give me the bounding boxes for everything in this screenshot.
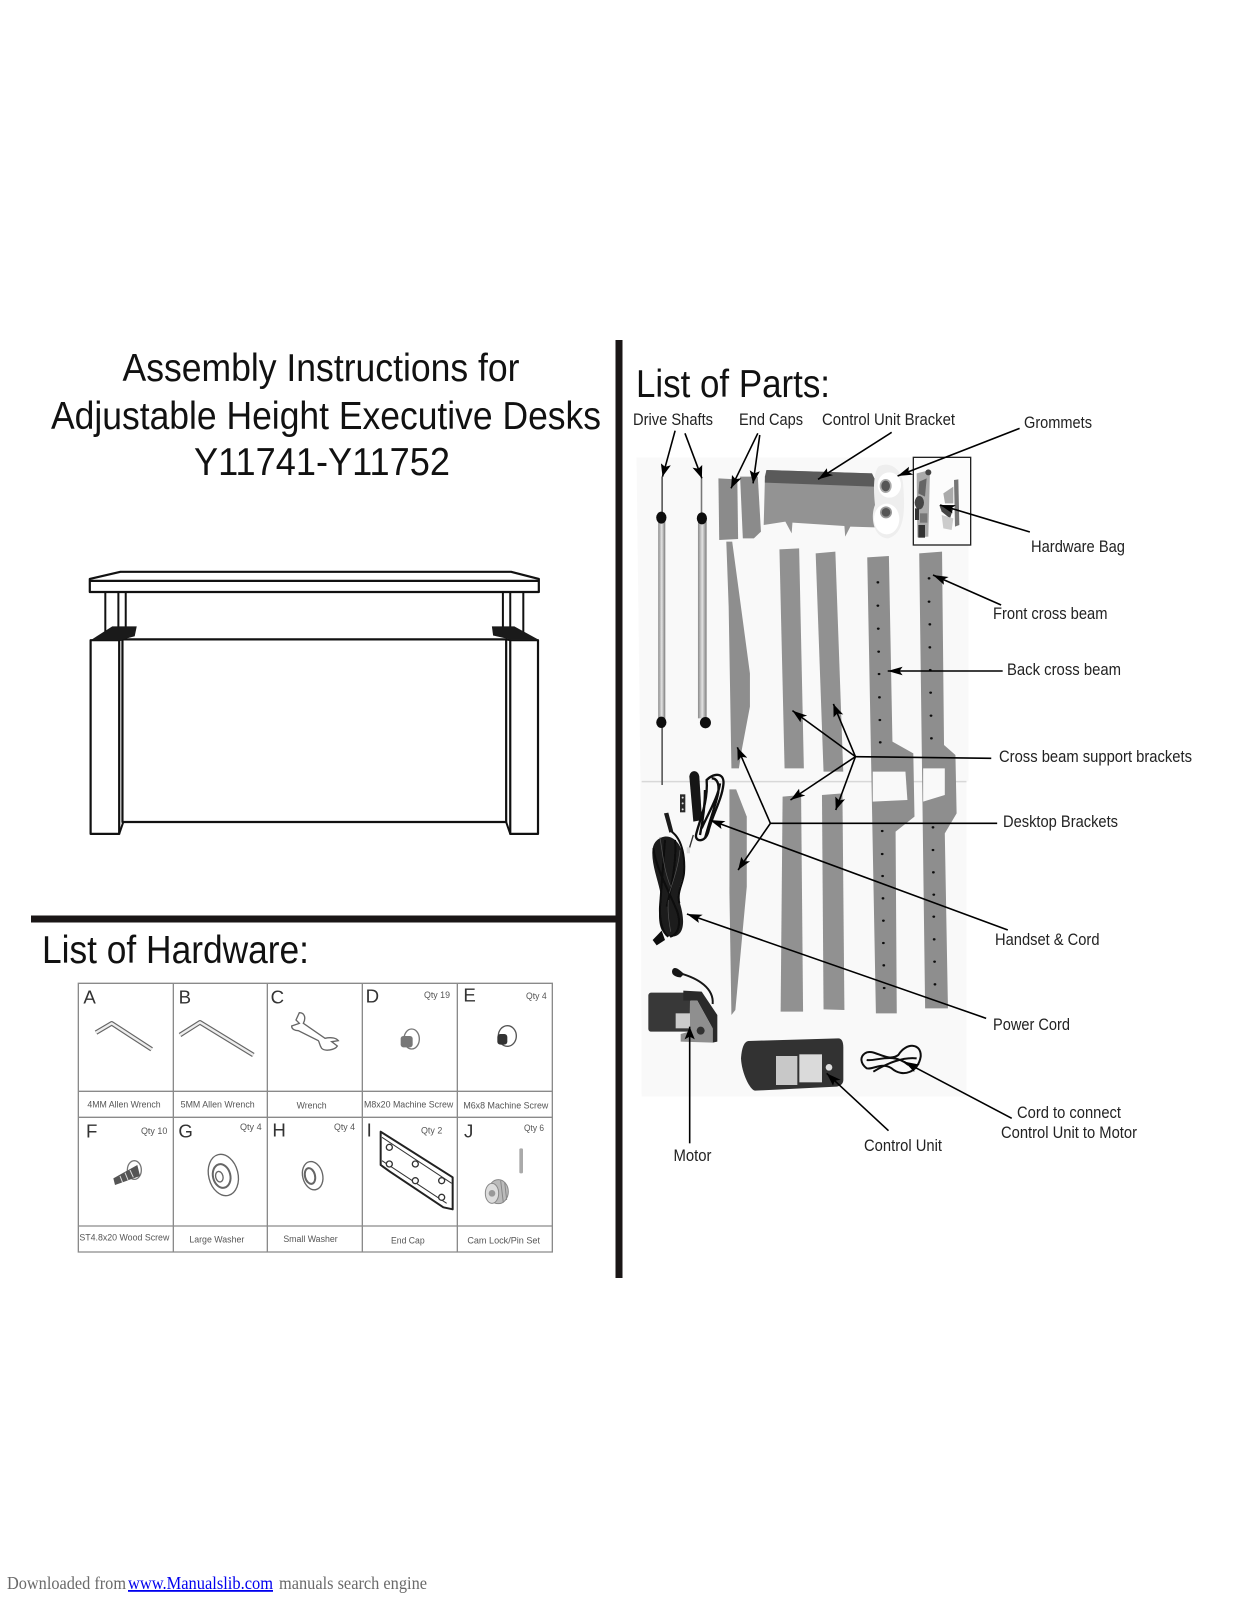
label: back cross beam: Back cross beam — [1007, 661, 1121, 679]
item F: wood screw: F — [86, 1121, 97, 1142]
handset and power cord — [652, 771, 724, 945]
item I: end cap plate: Qty 2 — [421, 1125, 442, 1135]
label: grommets: Grommets — [1024, 414, 1092, 432]
label: handset and cord: Handset & Cord — [995, 931, 1100, 949]
item H: small washer: Qty 4 — [334, 1122, 355, 1132]
item E: M6x8 machine screw — [463, 985, 549, 1110]
drive shafts — [656, 477, 711, 785]
control unit — [741, 1038, 843, 1091]
grommets and hardware bag — [873, 457, 971, 545]
item J: cam lock and pin set — [464, 1121, 544, 1245]
cross beam support brackets — [779, 548, 844, 1012]
label: desktop brackets: Desktop Brackets — [1003, 813, 1118, 831]
heading: list of hardware: List of Hardware: — [42, 929, 309, 972]
horizontal divider — [31, 916, 616, 922]
footer source line — [7, 1573, 427, 1593]
item J: cam lock and pin set: Cam Lock/Pin Set — [467, 1235, 541, 1245]
label: control unit: Control Unit — [864, 1137, 942, 1155]
footer source line: manuals search engine — [279, 1573, 427, 1593]
label: power cord: Power Cord — [993, 1016, 1070, 1034]
item A: 4MM Allen wrench: 4MM Allen Wrench — [87, 1100, 161, 1110]
arrows: desktop brackets — [737, 747, 997, 870]
handset and cord — [680, 771, 724, 853]
item E: M6x8 machine screw: E — [463, 985, 476, 1006]
arrows: end caps — [731, 433, 760, 488]
desktop brackets — [726, 542, 750, 1015]
title: Y11741-Y11752 — [194, 441, 450, 484]
label: cord to connect control unit to motor: Cord to connect — [1017, 1104, 1121, 1122]
end caps — [718, 477, 761, 540]
back cross beam — [867, 556, 914, 1013]
item C: wrench: Wrench — [297, 1100, 327, 1110]
item D: M8x20 machine screw: D — [366, 986, 379, 1007]
heading: list of parts: List of Parts: — [636, 363, 830, 406]
item C: wrench — [271, 986, 338, 1110]
title — [51, 347, 601, 484]
grommets — [873, 465, 904, 538]
table grid — [78, 983, 552, 1252]
item F: wood screw: ST4.8x20 Wood Screw — [79, 1232, 170, 1242]
item C: wrench: C — [271, 986, 284, 1007]
arrows — [663, 428, 1030, 1143]
arrow: grommets — [898, 428, 1020, 476]
item E: M6x8 machine screw: M6x8 Machine Screw — [463, 1100, 549, 1110]
arrow: control unit bracket — [818, 432, 892, 479]
item B: 5MM Allen wrench: 5MM Allen Wrench — [181, 1100, 255, 1110]
item H: small washer: H — [272, 1120, 286, 1141]
arrow: control unit — [827, 1073, 889, 1131]
item B: 5MM Allen wrench: B — [179, 986, 191, 1007]
item F: wood screw: Qty 10 — [141, 1126, 167, 1136]
arrow: motor — [689, 1027, 691, 1143]
label: hardware bag: Hardware Bag — [1031, 538, 1125, 556]
desk line drawing — [90, 572, 539, 834]
item G: large washer — [178, 1121, 262, 1245]
item D: M8x20 machine screw: Qty 19 — [424, 990, 450, 1000]
power cord — [652, 813, 684, 945]
item I: end cap plate — [367, 1120, 453, 1246]
photo background — [637, 457, 968, 1097]
panel: parts photo — [637, 457, 968, 1097]
arrow: front cross beam — [933, 575, 1001, 605]
vertical divider — [616, 340, 622, 1278]
arrows: drive shafts — [663, 431, 702, 478]
label: end caps: End Caps — [739, 411, 803, 429]
item H: small washer: Small Washer — [283, 1234, 338, 1244]
label: cord to connect control unit to motor: Control Unit to Motor — [1001, 1124, 1137, 1142]
front cross beam — [919, 552, 957, 1008]
motor connection cord — [861, 1046, 921, 1073]
title: Assembly Instructions for — [122, 347, 520, 390]
label: front cross beam: Front cross beam — [993, 605, 1108, 623]
item H: small washer — [272, 1120, 355, 1244]
item J: cam lock and pin set: J — [464, 1121, 473, 1142]
label: control unit bracket: Control Unit Bracket — [822, 411, 955, 429]
hardware bag — [913, 457, 971, 545]
item A: 4MM Allen wrench — [83, 986, 161, 1110]
item I: end cap plate: End Cap — [391, 1236, 425, 1246]
label: cross beam support brackets: Cross beam support brackets — [999, 748, 1192, 766]
label: motor: Motor — [674, 1147, 712, 1165]
item D: M8x20 machine screw — [364, 986, 454, 1110]
item A: 4MM Allen wrench: A — [83, 986, 96, 1007]
arrow: back cross beam — [888, 670, 1003, 672]
item I: end cap plate: I — [367, 1120, 372, 1141]
control unit bracket — [764, 470, 875, 537]
item E: M6x8 machine screw: Qty 4 — [526, 991, 547, 1001]
item G: large washer: Large Washer — [189, 1235, 244, 1245]
arrow: handset and cord — [710, 820, 1008, 930]
item D: M8x20 machine screw: M8x20 Machine Screw — [364, 1100, 454, 1110]
item F: wood screw — [79, 1121, 170, 1242]
item G: large washer: G — [178, 1121, 193, 1142]
title: Adjustable Height Executive Desks — [51, 395, 601, 438]
footer source line: www.Manualslib.com — [128, 1573, 273, 1593]
arrow: power cord — [687, 914, 986, 1018]
motor, control unit and connection cord — [648, 968, 921, 1091]
hardware table — [78, 983, 552, 1252]
item B: 5MM Allen wrench — [179, 986, 255, 1110]
item J: cam lock and pin set: Qty 6 — [524, 1123, 544, 1133]
footer source line: Downloaded from — [7, 1573, 126, 1593]
label: cord to connect control unit to motor — [1001, 1104, 1137, 1142]
arrow: hardware bag — [940, 505, 1030, 532]
arrows: cross beam support brackets — [790, 704, 991, 810]
motor — [648, 968, 717, 1043]
label: drive shafts: Drive Shafts — [633, 411, 713, 429]
item G: large washer: Qty 4 — [240, 1122, 262, 1132]
arrow: motor connection cord — [904, 1062, 1012, 1118]
